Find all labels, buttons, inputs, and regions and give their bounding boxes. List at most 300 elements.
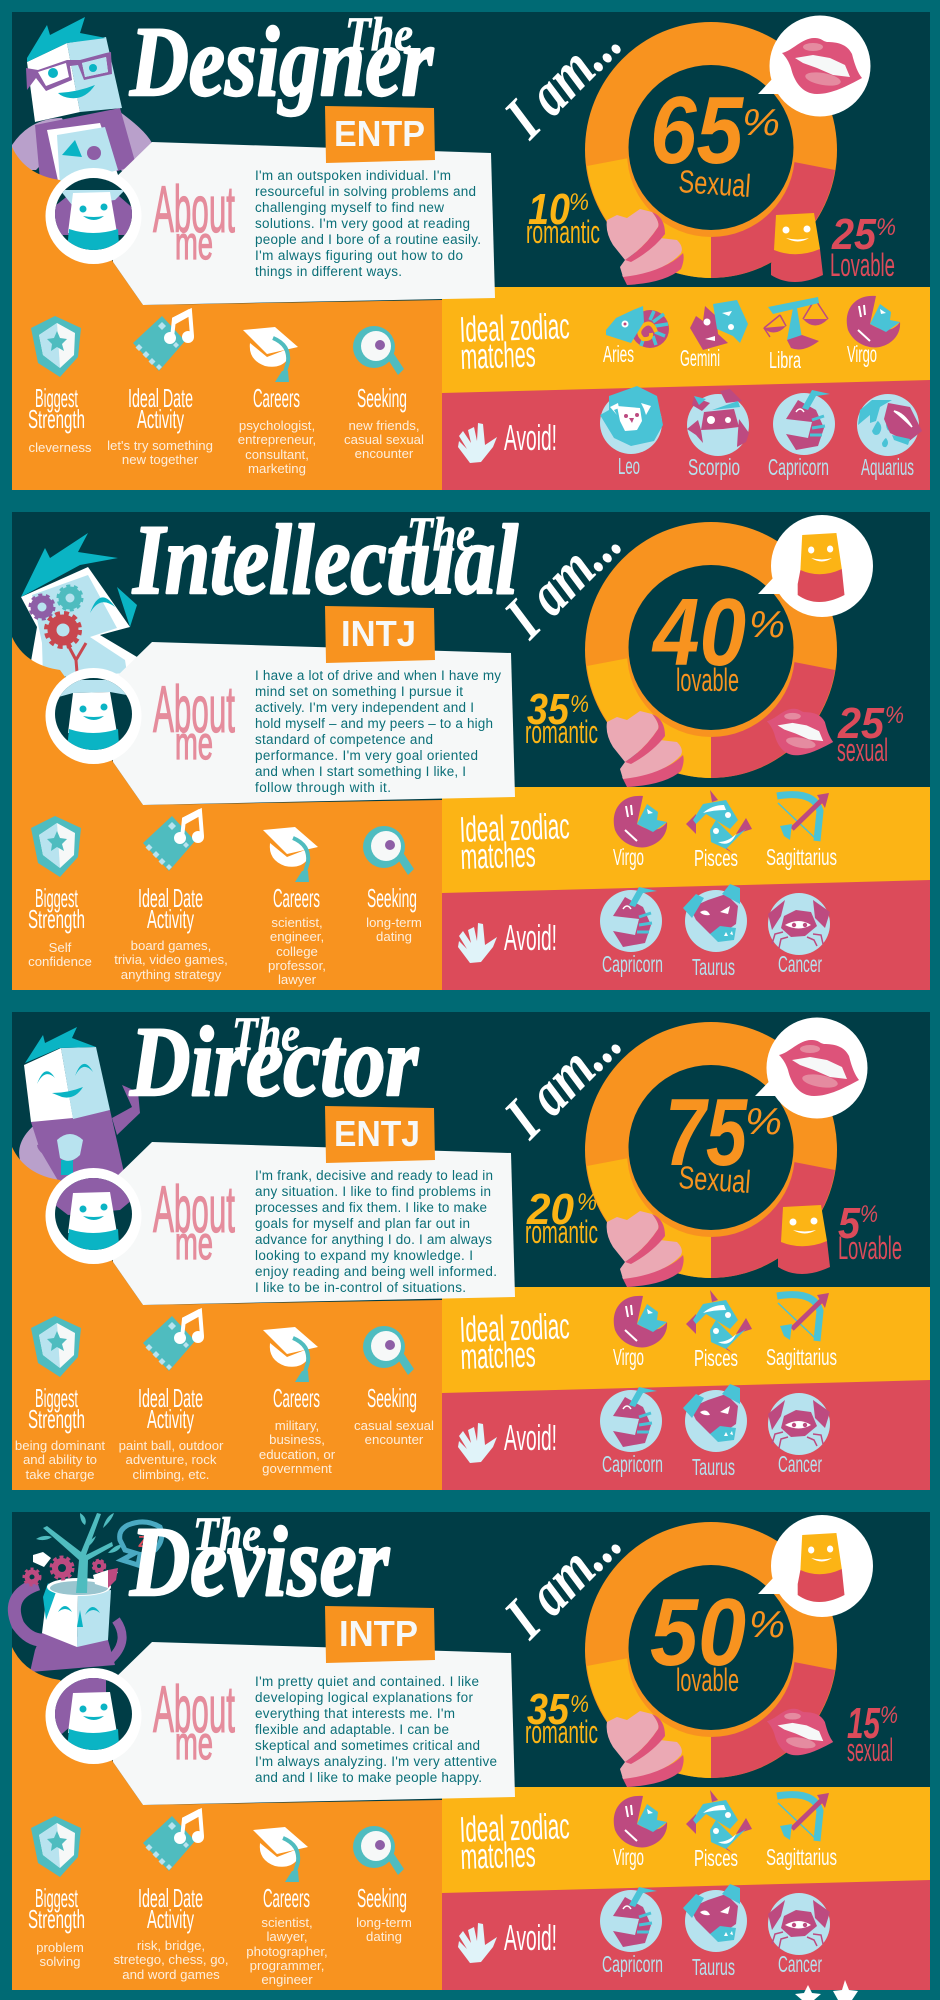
stat: ideal date: trivia, video games, <box>114 952 228 967</box>
stat: biggest strength: solving <box>39 1954 81 1969</box>
about text: standard of competence and <box>255 732 433 747</box>
about text: hold myself – and my peers – to a high <box>255 716 493 731</box>
zodiac: pisces <box>686 1790 752 1871</box>
avoid heading <box>458 423 556 463</box>
zodiac: capricorn: Capricorn <box>602 1951 663 1977</box>
about me heading <box>153 672 235 769</box>
stat: biggest strength <box>28 316 92 455</box>
about text: everything that interests me. I'm <box>255 1706 455 1721</box>
panel: the director: About <box>153 1172 235 1246</box>
zodiac: sagittarius: Sagittarius <box>766 1844 837 1870</box>
ideal zodiac heading: Ideal zodiac <box>459 1305 570 1350</box>
type badge: INTJ <box>341 613 416 654</box>
donut chart <box>585 22 837 278</box>
icon: candy heart <box>607 209 684 285</box>
stat: careers <box>259 1327 336 1476</box>
stat: biggest strength: take charge <box>26 1467 94 1482</box>
zodiac: scorpio <box>687 389 749 480</box>
zodiac: pisces: Pisces <box>694 1845 738 1871</box>
stat: seeking: Seeking <box>357 383 407 413</box>
avoid heading <box>458 917 557 963</box>
i am heading: I am... <box>491 1508 635 1651</box>
about text <box>255 1168 497 1295</box>
zodiac: pisces: Pisces <box>694 845 738 871</box>
ideal zodiac heading <box>459 1305 571 1377</box>
stat: ideal date: anything strategy <box>121 967 222 982</box>
about text: I'm always figuring out how to do <box>255 248 463 263</box>
stat: biggest strength: confidence <box>28 954 92 969</box>
donut chart <box>585 1022 837 1278</box>
stat: careers: Careers <box>263 1883 310 1913</box>
lovable percentage <box>838 1199 902 1266</box>
stat: seeking: long-term <box>356 1915 412 1930</box>
panel: the designer: About <box>153 172 235 246</box>
icon: lips <box>767 709 833 755</box>
stat: careers: marketing <box>248 461 306 476</box>
stat: careers: government <box>262 1461 332 1476</box>
romantic percentage <box>525 685 598 750</box>
stat: ideal date <box>114 809 228 982</box>
stat: careers: military, <box>275 1418 319 1433</box>
zodiac: cancer <box>768 1393 830 1477</box>
sexual percentage: % <box>880 1702 898 1729</box>
speech bubble with lips <box>758 16 870 116</box>
main percentage: 65 <box>650 77 744 184</box>
main percentage: % <box>742 102 780 144</box>
type badge: ENTJ <box>334 1113 420 1154</box>
type badge <box>325 106 435 163</box>
avatar <box>46 168 142 264</box>
character: intellectual with gears <box>21 533 137 685</box>
stat: careers: professor, <box>268 958 326 973</box>
speech bubble with box <box>758 1515 873 1617</box>
lovable percentage <box>831 218 896 276</box>
about text: goals for myself and plan far out in <box>255 1216 470 1231</box>
zodiac: gemini: Gemini <box>680 345 720 371</box>
main percentage: Sexual <box>678 163 752 204</box>
title: The <box>193 1508 261 1561</box>
zodiac: virgo: Virgo <box>613 1344 644 1370</box>
title: Intellectual <box>132 504 518 615</box>
zodiac: capricorn: Capricorn <box>602 1451 663 1477</box>
lovable percentage: % <box>860 1201 878 1228</box>
panel: the intellectual <box>12 504 930 990</box>
stat: careers <box>246 1827 328 1987</box>
panel: the deviser <box>12 1506 930 1990</box>
about text: looking to expand my knowledge. I <box>255 1248 473 1263</box>
right bands <box>442 787 930 990</box>
stat: biggest strength <box>15 1316 105 1482</box>
avoid heading: Avoid! <box>504 1417 557 1458</box>
about text: flexible and adaptable. I can be <box>255 1722 449 1737</box>
stat: biggest strength: Strength <box>28 1904 85 1934</box>
zodiac: scorpio: Scorpio <box>688 454 740 480</box>
stat: seeking <box>353 1826 412 1944</box>
about text: skeptical and sometimes critical and <box>255 1738 480 1753</box>
ideal zodiac heading <box>459 805 571 877</box>
type badge <box>325 1606 435 1663</box>
icon: lips <box>767 1709 833 1755</box>
footer stars <box>795 1980 858 2000</box>
about text: and and I like to make people happy. <box>255 1770 482 1785</box>
ideal zodiac heading: Ideal zodiac <box>459 1805 570 1850</box>
stat: biggest strength: Biggest <box>35 383 78 413</box>
about text <box>255 668 501 795</box>
sexual percentage: 25 <box>837 699 884 748</box>
zodiac: cancer <box>768 893 830 977</box>
zodiac: taurus <box>683 1884 747 1980</box>
stat: biggest strength: cleverness <box>28 440 92 455</box>
orange background <box>12 147 442 490</box>
stat: careers: entrepreneur, <box>238 432 316 447</box>
stat: seeking <box>354 1326 434 1447</box>
stat: ideal date: stretego, chess, go, <box>113 1952 229 1967</box>
stat: seeking: dating <box>366 1929 402 1944</box>
panel backdrop <box>12 1012 930 1490</box>
stat: seeking: new friends, <box>348 418 420 433</box>
sexual percentage <box>837 699 904 768</box>
about me heading <box>153 1672 235 1769</box>
sexual percentage: sexual <box>837 732 888 768</box>
type badge: INTP <box>339 1613 418 1654</box>
romantic percentage <box>527 193 600 244</box>
sexual percentage: 15 <box>847 1699 880 1748</box>
stat: ideal date <box>113 1809 229 1982</box>
zodiac: virgo <box>613 796 667 870</box>
zodiac: capricorn <box>600 887 663 977</box>
stat: biggest strength <box>28 816 92 969</box>
about card <box>113 1142 515 1305</box>
lovable percentage: 25 <box>831 210 876 259</box>
ideal zodiac heading <box>459 1805 571 1877</box>
main percentage: lovable <box>676 1662 739 1698</box>
about text <box>255 1674 497 1785</box>
romantic percentage <box>525 1685 598 1750</box>
stat: ideal date: new together <box>122 452 199 467</box>
zodiac: aquarius <box>857 394 922 480</box>
character: designer with glasses <box>12 17 152 190</box>
stat: seeking: casual sexual <box>354 1418 434 1433</box>
stat: biggest strength: being dominant <box>15 1438 105 1453</box>
stat: careers: Careers <box>273 883 320 913</box>
zodiac: sagittarius <box>766 1793 837 1870</box>
panel backdrop <box>12 512 930 990</box>
panel backdrop <box>12 1512 930 1990</box>
about card <box>113 1642 515 1805</box>
stat: biggest strength <box>28 1816 85 1969</box>
sexual percentage: % <box>885 702 904 729</box>
stat: seeking <box>363 826 422 944</box>
about text: mind set on something I pursue it <box>255 684 463 699</box>
about text: resourceful in solving problems and <box>255 184 476 199</box>
stat: careers: business, <box>269 1432 325 1447</box>
romantic percentage: romantic <box>526 214 600 250</box>
stat: ideal date: and word games <box>122 1967 220 1982</box>
romantic percentage: romantic <box>525 714 598 750</box>
stat: careers <box>238 327 316 476</box>
stat: seeking: encounter <box>355 446 414 461</box>
title: The <box>345 8 413 61</box>
stat: ideal date: Activity <box>137 404 184 434</box>
stat: biggest strength: problem <box>36 1940 84 1955</box>
stat: biggest strength: Biggest <box>35 1383 78 1413</box>
stat: careers: engineer <box>261 1972 313 1987</box>
romantic percentage: 10 <box>528 185 570 234</box>
about text: I'm always analyzing. I'm very attentive <box>255 1754 497 1769</box>
icon: lovable box <box>778 1205 830 1274</box>
main percentage: lovable <box>676 662 739 698</box>
right bands <box>442 287 930 490</box>
main percentage: % <box>749 1604 785 1646</box>
icon: candy heart <box>607 1711 684 1787</box>
stat: ideal date: Ideal Date <box>138 1883 203 1913</box>
main percentage: 75 <box>665 1079 748 1186</box>
stat: ideal date: Activity <box>147 1904 194 1934</box>
about card <box>113 142 495 305</box>
stat: careers: psychologist, <box>239 418 315 433</box>
main percentage <box>654 96 778 197</box>
lovable percentage: 5 <box>838 1199 860 1248</box>
stat: careers: programmer, <box>250 1958 324 1973</box>
about text: processes and fix them. I like to make <box>255 1200 487 1215</box>
about text: challenging myself to find new <box>255 200 444 215</box>
about text <box>255 168 481 279</box>
zodiac: capricorn <box>600 1887 663 1977</box>
title: The <box>232 1008 300 1061</box>
about text: I'm pretty quiet and contained. I like <box>255 1674 479 1689</box>
zodiac: virgo: Virgo <box>613 844 644 870</box>
stat: ideal date: climbing, etc. <box>133 1467 209 1482</box>
zodiac: taurus: Taurus <box>692 1954 735 1980</box>
main percentage: Sexual <box>678 1159 752 1200</box>
stat: careers: consultant, <box>245 447 309 462</box>
sexual percentage: sexual <box>847 1732 893 1768</box>
stat: ideal date: paint ball, outdoor <box>119 1438 224 1453</box>
zodiac: leo: Leo <box>618 453 640 479</box>
stat: careers: education, or <box>259 1447 336 1462</box>
about text: people and I bore of a routine easily. <box>255 232 481 247</box>
speech bubble with lips <box>755 1018 868 1118</box>
panel: the intellectual: About <box>153 672 235 746</box>
stat: ideal date: Ideal Date <box>138 883 203 913</box>
romantic percentage: % <box>577 1189 597 1216</box>
main percentage: 40 <box>651 579 746 686</box>
ideal zodiac heading: matches <box>460 1833 536 1877</box>
avoid heading: Avoid! <box>504 917 557 958</box>
stat: biggest strength: Strength <box>28 404 85 434</box>
zodiac: cancer <box>768 1893 830 1977</box>
avoid heading <box>458 1417 557 1463</box>
about text: follow through with it. <box>255 780 391 795</box>
zodiac: sagittarius: Sagittarius <box>766 1344 837 1370</box>
stat: seeking <box>344 326 424 461</box>
icon: candy heart <box>607 711 684 787</box>
ideal zodiac heading <box>461 313 570 369</box>
lovable percentage: % <box>876 214 896 241</box>
romantic percentage: 35 <box>527 1685 569 1734</box>
zodiac: cancer: Cancer <box>778 951 822 977</box>
right bands <box>442 1787 930 1990</box>
main percentage: % <box>749 604 785 646</box>
stat: seeking: dating <box>376 929 412 944</box>
zodiac: aries <box>603 306 669 367</box>
romantic percentage: % <box>569 189 589 216</box>
stat: biggest strength: Self <box>49 940 72 955</box>
zodiac: pisces: Pisces <box>694 1345 738 1371</box>
zodiac: aries: Aries <box>603 341 634 367</box>
zodiac: taurus: Taurus <box>692 1454 735 1480</box>
i am heading: I am... <box>491 508 635 651</box>
zodiac: capricorn: Capricorn <box>768 454 829 480</box>
panel: the deviser: About <box>153 1672 235 1746</box>
zodiac: cancer: Cancer <box>778 1451 822 1477</box>
zodiac: pisces <box>686 1290 752 1371</box>
avoid heading: Avoid! <box>504 1917 557 1958</box>
character: director with microphone <box>19 1027 140 1184</box>
stat: seeking: Seeking <box>367 883 417 913</box>
zodiac: gemini <box>680 300 748 371</box>
panel backdrop <box>12 12 930 305</box>
orange background <box>12 1647 442 1990</box>
zodiac: virgo <box>847 296 900 367</box>
about text: performance. I'm very goal oriented <box>255 748 478 763</box>
stat: careers: college <box>276 944 318 959</box>
title: Director <box>129 1006 419 1117</box>
romantic percentage: % <box>570 691 589 718</box>
type badge: ENTP <box>334 113 425 154</box>
avatar <box>46 668 142 764</box>
stat: ideal date: Activity <box>147 1404 194 1434</box>
zodiac: sagittarius <box>766 1293 837 1370</box>
stat: careers: Careers <box>273 1383 320 1413</box>
about text: I'm frank, decisive and ready to lead in <box>255 1168 493 1183</box>
avatar <box>46 1168 142 1264</box>
stat: seeking: encounter <box>365 1432 424 1447</box>
about me heading <box>152 183 235 260</box>
about text: and when I start something I like, I <box>255 764 466 779</box>
zodiac: virgo <box>613 1796 667 1870</box>
main percentage: 50 <box>650 1579 746 1686</box>
about text: any situation. I like to find problems in <box>255 1184 491 1199</box>
stat: ideal date: Activity <box>147 904 194 934</box>
about me heading <box>153 1172 235 1269</box>
romantic percentage: romantic <box>525 1714 598 1750</box>
zodiac: libra: Libra <box>769 347 801 373</box>
stat: ideal date: risk, bridge, <box>137 1938 205 1953</box>
about text: things in different ways. <box>255 264 402 279</box>
about text: I like to be in-control of situations. <box>255 1280 466 1295</box>
main percentage: % <box>745 1101 782 1143</box>
avoid heading <box>458 1917 557 1963</box>
icon: lovable box <box>771 213 823 282</box>
zodiac: taurus <box>683 884 747 980</box>
stat: ideal date: Ideal Date <box>128 383 193 413</box>
about text: I have a lot of drive and when I have my <box>255 668 501 683</box>
character: deviser with idea tree: Z <box>138 1534 148 1551</box>
stat: biggest strength: Biggest <box>35 1883 78 1913</box>
stat: biggest strength: Strength <box>28 1404 85 1434</box>
orange background <box>12 637 442 990</box>
sexual percentage <box>847 1699 898 1768</box>
stat: careers <box>263 827 326 987</box>
speech bubble with box <box>758 515 873 617</box>
stat: ideal date: adventure, rock <box>126 1452 217 1467</box>
romantic percentage: 20 <box>526 1185 574 1234</box>
stat: careers: Careers <box>253 383 300 413</box>
zodiac: capricorn <box>600 1387 663 1477</box>
zodiac: capricorn <box>768 390 835 480</box>
about text: enjoy reading and being well informed. <box>255 1264 497 1279</box>
type badge <box>325 1106 435 1163</box>
romantic percentage: 35 <box>527 685 569 734</box>
about me heading: me <box>175 717 213 769</box>
title: Designer <box>129 6 434 117</box>
zodiac: virgo: Virgo <box>613 1844 644 1870</box>
stat: ideal date: board games, <box>131 938 211 953</box>
panel: the director <box>12 1006 930 1490</box>
stat: biggest strength: and ability to <box>23 1452 97 1467</box>
about me heading: me <box>175 1717 213 1769</box>
donut chart <box>585 522 837 778</box>
zodiac: virgo <box>613 1296 667 1370</box>
title: Deviser <box>129 1506 390 1617</box>
stat: seeking: Seeking <box>367 1383 417 1413</box>
ideal zodiac heading: Ideal zodiac <box>459 305 570 350</box>
stat: careers: scientist, <box>271 915 323 930</box>
ideal zodiac heading: matches <box>460 833 536 877</box>
type badge <box>325 606 435 663</box>
zodiac: sagittarius <box>766 793 837 870</box>
about me heading: me <box>175 217 213 269</box>
i am heading: I am... <box>491 1008 635 1151</box>
lovable percentage: Lovable <box>830 247 895 283</box>
zodiac: libra <box>763 297 828 373</box>
romantic percentage: % <box>570 1691 589 1718</box>
about text: advance for anything I do. I am always <box>255 1232 492 1247</box>
icon: candy heart <box>607 1211 684 1287</box>
stat: biggest strength: Biggest <box>35 883 78 913</box>
ideal zodiac heading: matches <box>460 1333 536 1377</box>
about text: I'm an outspoken individual. I'm <box>255 168 451 183</box>
zodiac: virgo: Virgo <box>847 341 877 367</box>
character: deviser with idea tree <box>14 1513 162 1672</box>
zodiac: sagittarius: Sagittarius <box>766 844 837 870</box>
stat: seeking: casual sexual <box>344 432 424 447</box>
stat: careers: photographer, <box>246 1944 328 1959</box>
romantic percentage <box>525 1185 598 1250</box>
about text: actively. I'm very independent and I <box>255 700 474 715</box>
about text: solutions. I'm very good at reading <box>255 216 470 231</box>
stat: ideal date <box>119 1309 224 1482</box>
zodiac: taurus: Taurus <box>692 954 735 980</box>
ideal zodiac heading: Ideal zodiac <box>459 805 570 850</box>
stat: ideal date: let's try something <box>107 438 213 453</box>
stat: careers: lawyer, <box>266 1929 308 1944</box>
zodiac: cancer: Cancer <box>778 1951 822 1977</box>
donut chart <box>585 1522 837 1778</box>
about me heading: me <box>175 1217 213 1269</box>
ideal zodiac heading: matches <box>460 333 536 377</box>
right bands <box>442 1287 930 1490</box>
zodiac: taurus <box>683 1384 747 1480</box>
panel: the designer <box>12 6 930 490</box>
stat: ideal date <box>107 309 213 467</box>
stat: careers: scientist, <box>261 1915 313 1930</box>
zodiac: leo <box>600 386 663 479</box>
about card <box>113 642 515 805</box>
avatar <box>46 1668 142 1764</box>
stat: seeking: Seeking <box>357 1883 407 1913</box>
